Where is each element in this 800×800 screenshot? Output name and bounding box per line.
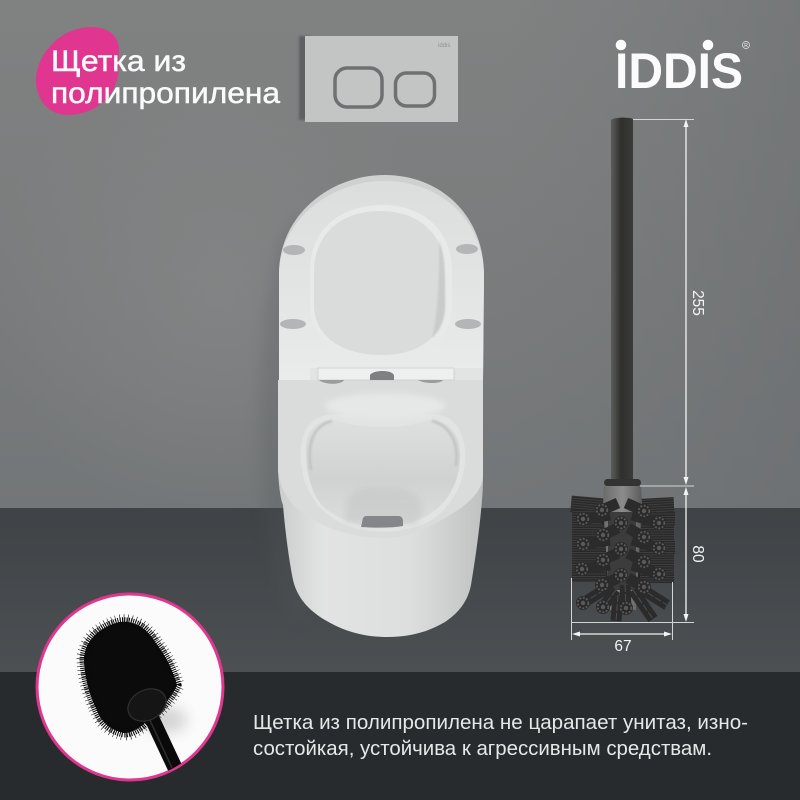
description text (253, 712, 748, 760)
back bristles (570, 495, 675, 583)
dimension: height 80: 80 (689, 545, 706, 563)
background: floor (0, 508, 800, 673)
dark mass behind bristles (574, 505, 672, 581)
heading: полипропилена (51, 77, 280, 110)
background: wall (0, 0, 800, 530)
dimension: width 67 (572, 578, 672, 655)
dimension: height 255 (633, 119, 706, 486)
background: bottom band (0, 672, 800, 800)
toilet (260, 175, 484, 637)
close-up brush rod (147, 708, 177, 772)
seat inner ring (310, 205, 452, 361)
hinges (319, 380, 443, 384)
logo: IDDIS (615, 43, 743, 99)
brush: rod (611, 118, 633, 482)
description text: Щетка из полипропилена не царапает унитаз, изно- (253, 712, 748, 734)
brush collar (604, 479, 641, 486)
description text: состойкая, устойчива к агрессивным средствам. (253, 738, 712, 760)
heading (51, 45, 280, 110)
soft shadow (143, 706, 187, 734)
bowl opening (306, 420, 460, 527)
hinge release button (370, 371, 394, 380)
close-up brush collar (127, 688, 167, 722)
close-up brush bristles (84, 622, 177, 733)
seat bumpers (280, 244, 481, 329)
toilet bowl body (278, 382, 483, 637)
large flush button (335, 68, 382, 107)
seat inner panel (314, 211, 445, 355)
lower bristles (583, 585, 667, 621)
sump shadow (345, 487, 423, 524)
bowl opening outer ring (301, 414, 465, 531)
seat hinge bar (310, 368, 483, 380)
pink blob (36, 27, 119, 115)
dimension: width 67: 67 (614, 638, 632, 655)
brush core (603, 485, 642, 610)
heading: Щетка из (51, 45, 186, 78)
bristle tips (575, 503, 666, 615)
dimension: height 255: 255 (689, 290, 706, 316)
dimension: height 80 (571, 487, 706, 622)
small flush button (396, 73, 434, 106)
toilet seat lid (279, 175, 484, 380)
flush plate (299, 36, 458, 122)
brush: head with bristles (570, 479, 675, 621)
drain (361, 516, 403, 528)
inset photo: brush close-up (37, 594, 223, 780)
bowl rim (278, 380, 483, 538)
plate brand mark: iddis (438, 43, 450, 49)
front bristles (582, 503, 659, 587)
logo: R (744, 43, 748, 49)
